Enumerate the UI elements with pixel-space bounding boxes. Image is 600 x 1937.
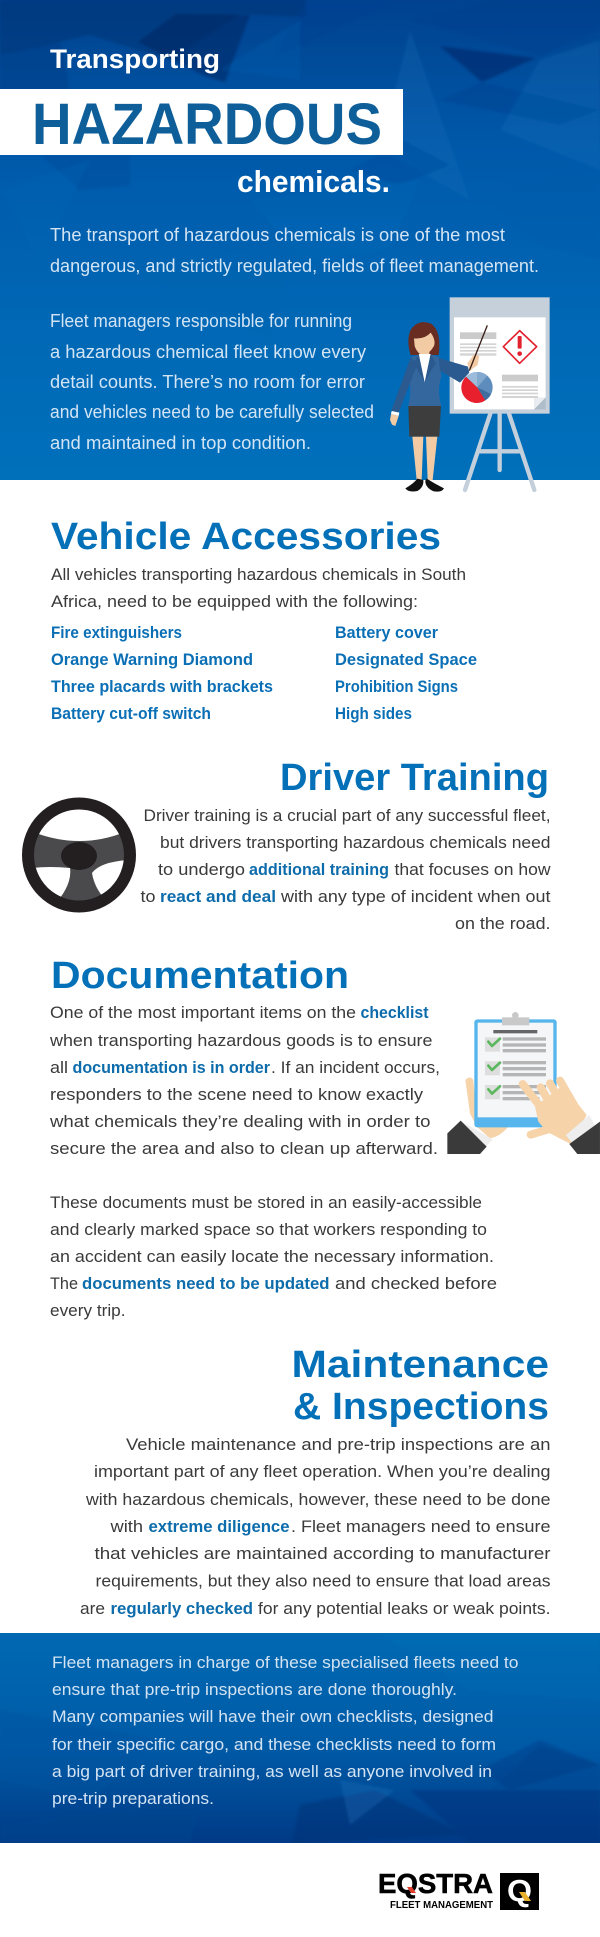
heading: Driver Training: Driver Training bbox=[280, 757, 549, 799]
pie chart bbox=[461, 372, 493, 403]
text block: driver training: to undergo bbox=[158, 860, 245, 879]
icon: steering wheel bbox=[22, 798, 136, 912]
text block: documentation first paragraph: all bbox=[50, 1058, 68, 1077]
title: Transporting: Transporting bbox=[50, 44, 220, 74]
list: accessories left column: Orange Warning Diamond bbox=[51, 650, 253, 669]
text block: maintenance: important part of any fleet operation. When you’re dealing bbox=[94, 1462, 550, 1481]
chart board bbox=[450, 297, 550, 414]
text block: documentation second paragraph: and checked before bbox=[335, 1274, 497, 1293]
panel: hero background bbox=[0, 0, 600, 480]
heading: Vehicle Accessories: Vehicle Accessories bbox=[51, 516, 441, 558]
text block: fleet managers: and vehicles need to be carefully selected bbox=[50, 402, 374, 422]
title banner: HAZARDOUS: HAZARDOUS bbox=[32, 92, 382, 157]
text block: hero intro: The transport of hazardous chemicals is one of the most bbox=[50, 225, 505, 245]
text block: documentation second paragraph: The bbox=[50, 1274, 78, 1293]
text block: closing band bbox=[52, 1653, 518, 1808]
logo: Eqstra Fleet Management bbox=[378, 1868, 539, 1911]
text block: hero intro: dangerous, and strictly regulated, fields of fleet management. bbox=[50, 256, 539, 276]
list: accessories left column: Battery cut-off switch bbox=[51, 704, 211, 723]
text block: documentation first paragraph: what chemicals they’re dealing with in order to bbox=[49, 1112, 431, 1131]
text block: documentation first paragraph: checklist bbox=[360, 1003, 429, 1022]
text block: documentation second paragraph: These documents must be stored in an easily-accessible bbox=[50, 1193, 482, 1212]
easel legs bbox=[465, 414, 534, 490]
text block: driver training: Driver training is a crucial part of any successful fleet, bbox=[144, 806, 550, 825]
heading: Maintenance and Inspections: & Inspections bbox=[293, 1386, 549, 1428]
text block: hero intro bbox=[50, 225, 539, 276]
list: accessories left column bbox=[51, 623, 273, 723]
text block: documentation first paragraph: . If an incident occurs, bbox=[271, 1058, 440, 1077]
right hand bbox=[523, 1081, 587, 1144]
text block: maintenance: Vehicle maintenance and pre-trip inspections are an bbox=[126, 1435, 550, 1454]
text block: driver training: react and deal bbox=[160, 887, 276, 906]
text block: documentation second paragraph bbox=[50, 1193, 497, 1320]
left hand bbox=[465, 1077, 508, 1138]
text block: closing band: Many companies will have their own checklists, designed bbox=[52, 1707, 494, 1726]
cuffs and sleeves bbox=[447, 1115, 600, 1154]
text block: documentation second paragraph: every trip. bbox=[50, 1301, 126, 1320]
list: accessories right column bbox=[335, 623, 477, 723]
icon: presenter at flip chart bbox=[390, 297, 550, 492]
text block: documentation first paragraph: when transporting hazardous goods is to ensure bbox=[49, 1031, 432, 1050]
text block: driver training: with any type of incident when out bbox=[280, 887, 551, 906]
text block: driver training bbox=[140, 806, 551, 933]
text block: maintenance: with bbox=[109, 1517, 143, 1536]
text block: closing band: for their specific cargo, and these checklists need to form bbox=[52, 1735, 496, 1754]
text block: documentation first paragraph: One of the most important items on the bbox=[50, 1003, 356, 1022]
text block: maintenance: . Fleet managers need to ensure bbox=[291, 1517, 550, 1536]
list: accessories left column: Three placards with brackets bbox=[51, 677, 273, 696]
text block: driver training: to bbox=[140, 887, 156, 906]
heading: Maintenance and Inspections bbox=[292, 1344, 549, 1428]
list: accessories left column: Fire extinguishers bbox=[51, 623, 182, 642]
text block: documentation first paragraph: secure the area and also to clean up afterward. bbox=[50, 1139, 438, 1158]
text block: fleet managers: detail counts. There’s no room for error bbox=[50, 372, 365, 392]
text block: driver training: additional training bbox=[249, 860, 389, 879]
text block: documentation first paragraph: responders to the scene need to know exactly bbox=[50, 1085, 424, 1104]
text block: maintenance: for any potential leaks or weak points. bbox=[258, 1599, 550, 1618]
text block: accessories intro bbox=[51, 565, 466, 611]
text block: documentation second paragraph: and clearly marked space so that workers responding to bbox=[50, 1220, 487, 1239]
text block: maintenance: that vehicles are maintained according to manufacturer bbox=[94, 1544, 551, 1563]
list: accessories right column: Battery cover bbox=[335, 623, 438, 642]
text block: closing band: Fleet managers in charge of these specialised fleets need to bbox=[52, 1653, 518, 1672]
logo: Eqstra Fleet Management: FLEET MANAGEMENT bbox=[390, 1899, 494, 1911]
icon: hands holding checklist clipboard bbox=[447, 1012, 600, 1154]
text block: driver training: on the road. bbox=[455, 914, 550, 933]
text block: closing band: a big part of driver training, as well as anyone involved in bbox=[52, 1762, 492, 1781]
text block: documentation second paragraph: documents need to be updated bbox=[82, 1274, 330, 1293]
heading: Documentation: Documentation bbox=[51, 955, 349, 997]
text block: driver training: that focuses on how bbox=[394, 860, 551, 879]
list: accessories right column: High sides bbox=[335, 704, 412, 723]
list: accessories right column: Designated Space bbox=[335, 650, 477, 669]
list: accessories right column: Prohibition Signs bbox=[335, 677, 458, 696]
heading: Maintenance and Inspections: Maintenance bbox=[292, 1344, 549, 1386]
text block: accessories intro: Africa, need to be equipped with the following: bbox=[51, 592, 418, 611]
text block: fleet managers: a hazardous chemical fleet know every bbox=[50, 342, 366, 362]
title: chemicals: chemicals. bbox=[237, 164, 390, 199]
text block: fleet managers: and maintained in top condition. bbox=[50, 433, 311, 453]
text block: driver training: but drivers transporting hazardous chemicals need bbox=[160, 833, 550, 852]
text block: fleet managers bbox=[50, 311, 374, 453]
icon: hazard diamond bbox=[503, 331, 537, 363]
text block: maintenance: are bbox=[80, 1599, 105, 1618]
text block: documentation second paragraph: an accident can easily locate the necessary information. bbox=[50, 1247, 494, 1266]
text block: documentation first paragraph bbox=[49, 1003, 440, 1158]
panel: closing band background bbox=[0, 1633, 600, 1843]
text block: closing band: pre-trip preparations. bbox=[52, 1789, 214, 1808]
presenter figure bbox=[390, 322, 487, 492]
text block: maintenance: requirements, but they also need to ensure that load areas bbox=[96, 1572, 550, 1590]
text block: maintenance: regularly checked bbox=[110, 1599, 253, 1618]
logo: Eqstra Fleet Management: Q bbox=[507, 1873, 532, 1908]
text block: closing band: ensure that pre-trip inspections are done thoroughly. bbox=[52, 1680, 457, 1699]
text block: accessories intro: All vehicles transporting hazardous chemicals in South bbox=[51, 565, 466, 584]
text block: documentation first paragraph: documentation is in order bbox=[72, 1058, 270, 1077]
text block: maintenance: with hazardous chemicals, however, these need to be done bbox=[85, 1490, 550, 1509]
text block: maintenance: extreme diligence bbox=[148, 1517, 290, 1536]
logo: Eqstra Fleet Management: EQSTRA bbox=[378, 1868, 493, 1899]
clipboard bbox=[474, 1012, 557, 1127]
text block: maintenance bbox=[80, 1435, 551, 1618]
text block: fleet managers: Fleet managers responsible for running bbox=[50, 311, 352, 331]
